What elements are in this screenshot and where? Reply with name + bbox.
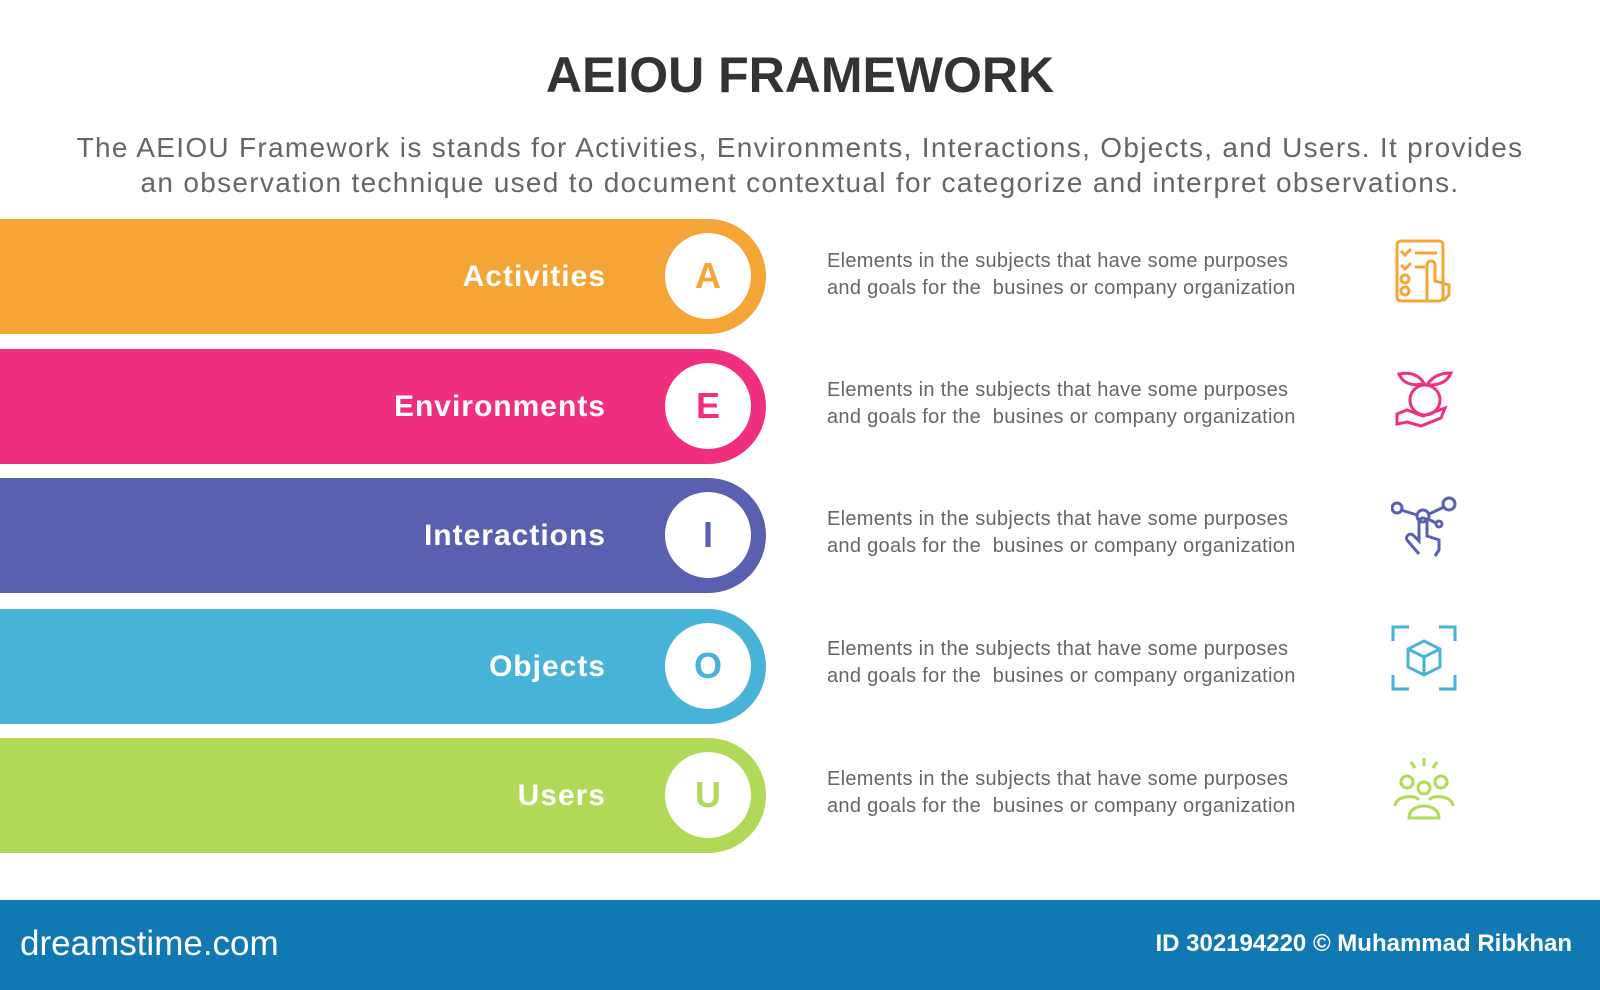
description 1: Elements in the subjects that have some purposes (827, 250, 1288, 272)
description 5 (827, 768, 1296, 817)
bar: Users (0, 738, 766, 853)
bar: Users: Users (518, 779, 606, 812)
icon: box scan (1392, 626, 1456, 690)
description 1 (827, 250, 1296, 299)
icon: globe plant (1396, 372, 1454, 428)
icon: users (1394, 758, 1454, 820)
bar: Objects (0, 609, 766, 724)
bar: Activities (0, 219, 766, 334)
description 3: Elements in the subjects that have some purposes (827, 508, 1288, 530)
footer: id: ID 302194220 © Muhammad Ribkhan (1155, 930, 1572, 957)
description 5: Elements in the subjects that have some purposes (827, 768, 1288, 790)
bar: Environments (0, 349, 766, 464)
description 3 (827, 508, 1296, 557)
bar: Objects: Objects (489, 650, 606, 683)
description 3: and goals for the busines or company organization (827, 535, 1296, 557)
bar: Environments: E (696, 385, 720, 426)
bar: Objects: O (694, 645, 722, 686)
description 4 (827, 638, 1296, 687)
bar: Environments: Environments (394, 390, 606, 423)
subtitle: The AEIOU Framework is stands for Activities, Environments, Interactions, Objects, and Users. It provides (77, 132, 1523, 163)
bar: Interactions: Interactions (424, 519, 606, 552)
bar: Activities: A (695, 255, 721, 296)
subtitle (77, 132, 1523, 198)
description 2 (827, 379, 1296, 428)
bar: Interactions (0, 478, 766, 593)
description 2: and goals for the busines or company organization (827, 406, 1296, 428)
subtitle: an observation technique used to document contextual for categorize and interpret observations. (141, 167, 1459, 198)
description 1: and goals for the busines or company organization (827, 277, 1296, 299)
description 5: and goals for the busines or company organization (827, 795, 1296, 817)
icon: checklist (1396, 240, 1450, 302)
bar: Interactions: I (703, 514, 713, 555)
description 4: Elements in the subjects that have some purposes (827, 638, 1288, 660)
title: AEIOU FRAMEWORK (546, 47, 1054, 103)
description 2: Elements in the subjects that have some purposes (827, 379, 1288, 401)
footer (0, 900, 1600, 990)
description 4: and goals for the busines or company organization (827, 665, 1296, 687)
icon: network touch (1391, 496, 1456, 557)
footer: brand: dreamstime.com (20, 924, 279, 963)
bar: Activities: Activities (463, 260, 606, 293)
bar: Users: U (695, 774, 721, 815)
